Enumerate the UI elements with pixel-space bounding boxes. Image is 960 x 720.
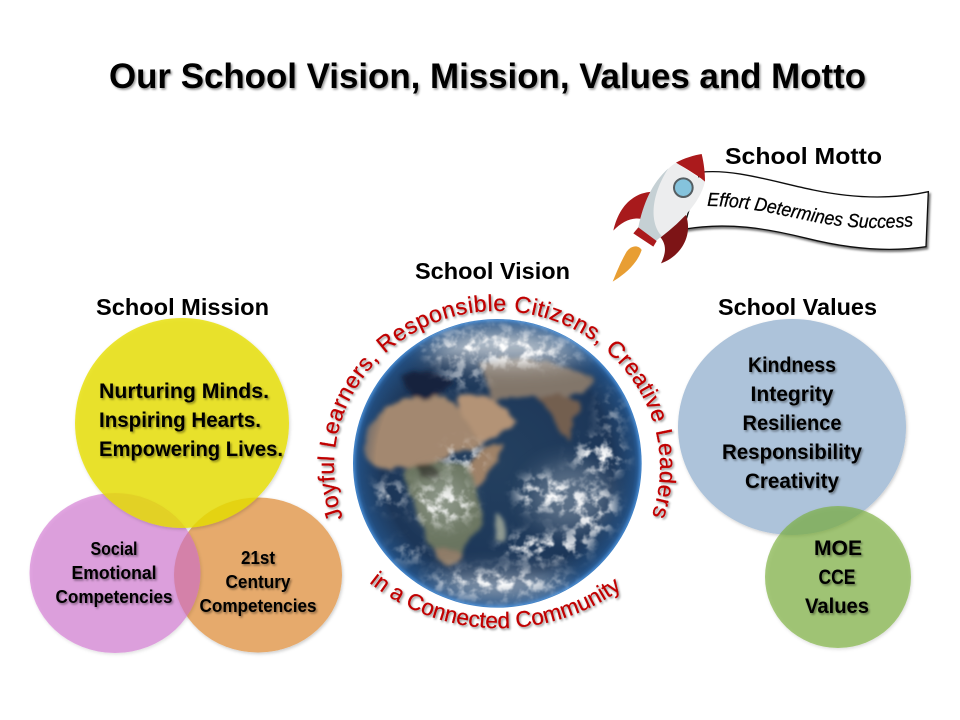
heading: school values: School Values [718,294,877,320]
moe cce values text: MOE [814,537,862,560]
21st century text: Century [226,572,290,592]
social emotional text: Emotional [72,563,156,583]
mission statement text: Nurturing Minds. [99,380,269,403]
circle: mission statement [75,318,289,528]
heading: school vision: School Vision [415,258,570,284]
panel: school values circles [678,319,911,648]
circle: 21st century competencies [174,498,342,652]
values list: Responsibility [722,441,862,464]
icon: rocket [613,154,705,282]
21st century text: Competencies [200,596,316,616]
circle: social emotional competencies [30,493,200,653]
haze [420,323,610,605]
values list: Creativity [745,470,839,493]
vision text: upper arc: Joyful Learners, Responsible Citizens, Creative Leaders [317,294,679,522]
title: Our School Vision, Mission, Values and Motto [109,57,866,96]
motto text: Effort Determines Success [708,192,912,228]
vision text: lower arc: in a Connected Community [370,570,622,632]
panel: school mission circles [30,318,342,653]
mission statement text: Inspiring Hearts. [99,409,261,432]
values list: Resilience [742,412,842,435]
mission statement text [99,380,283,461]
circle: school values [678,319,906,535]
motto banner and rocket [613,154,928,282]
values list: Integrity [750,383,834,406]
values list [722,354,862,493]
21st century text [200,548,316,616]
values list: Kindness [748,354,836,377]
cloud cover [373,323,627,602]
social emotional text: Competencies [56,587,172,607]
moe cce values text [805,537,869,618]
banner [683,172,928,249]
social emotional text [56,539,172,607]
vision text arc [317,294,679,632]
circle: moe cce values [765,506,911,648]
21st century text: 21st [241,548,275,568]
land masses [363,357,593,566]
moe cce values text: CCE [818,566,856,589]
social emotional text: Social [90,539,138,559]
moe cce values text: Values [805,595,869,618]
heading: school mission: School Mission [96,294,269,320]
mission statement text: Empowering Lives. [99,438,283,461]
icon: earth globe [353,319,642,608]
heading: school motto: School Motto [725,143,882,169]
